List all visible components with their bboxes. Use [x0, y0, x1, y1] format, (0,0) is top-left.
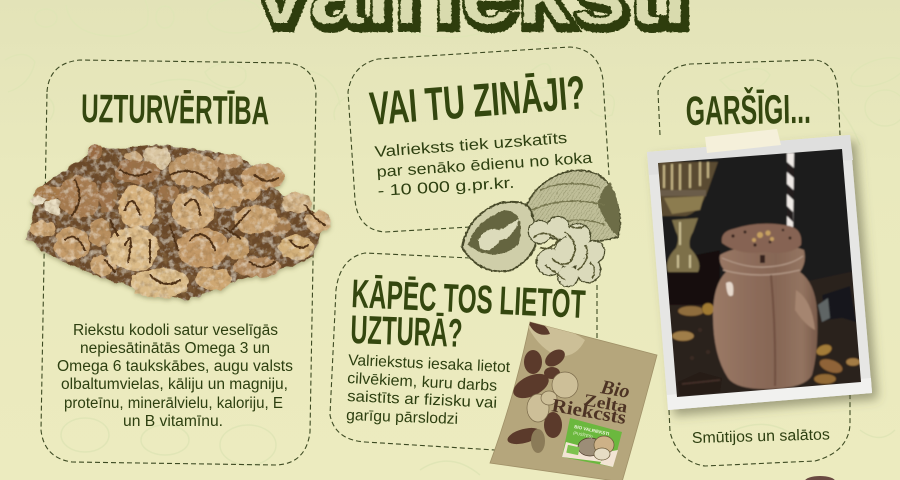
trophy — [658, 162, 718, 272]
heading: tasty: GARŠĪGI... — [685, 86, 811, 134]
package artwork: leaves — [506, 320, 585, 453]
body text: nutrition: Omega 6 taukskābes, augu valsts — [57, 358, 293, 375]
body text: nutrition: nepiesātinātās Omega 3 un — [80, 340, 270, 357]
illustration: walnuts — [462, 170, 620, 286]
heading: nutrition: UZTURVĒRTĪBA — [81, 87, 269, 133]
package green label — [562, 418, 622, 467]
body text: why use: saistīts ar fizisku vai — [347, 388, 497, 412]
body text: did you know: - 10 000 g.pr.kr. — [377, 175, 515, 200]
package brand name: Zelta — [582, 390, 629, 417]
panel: nutrition — [27, 60, 330, 465]
photo: smoothie polaroid — [647, 129, 872, 410]
image: product package — [490, 320, 657, 480]
panel: why use — [330, 253, 597, 450]
kernel crevices — [65, 170, 325, 284]
package brand name: Riekcsts — [550, 395, 628, 429]
body text: did you know: par senāko ēdienu no koka — [376, 150, 593, 181]
table — [670, 272, 861, 397]
foam topping — [722, 224, 801, 253]
body text: why use — [346, 352, 511, 428]
body text: did you know: Valrieksts tiek uzskatīts — [374, 130, 568, 161]
tape — [705, 129, 781, 153]
body text: why use: Valriekstus iesaka lietot — [348, 352, 511, 376]
package green label: (PUSĪTES) — [573, 430, 594, 439]
heading: did you know: VAI TU ZINĀJI? — [368, 65, 587, 135]
package brand name: Bio — [598, 376, 631, 403]
heading: why use — [350, 272, 586, 356]
photo scene — [658, 149, 861, 397]
camera object — [818, 286, 856, 322]
body text: nutrition: olbaltumvielas, kāliju un magniju, — [61, 376, 288, 393]
package brand name — [550, 376, 631, 429]
body text: nutrition — [57, 322, 293, 430]
body text: why use: garīgu pārslodzi — [346, 407, 458, 428]
body text: did you know — [374, 130, 593, 200]
walnut pieces — [672, 303, 860, 384]
body text: nutrition: proteīnu, minerālvielu, kaloriju, E — [64, 395, 283, 412]
chocolate — [678, 372, 722, 396]
heading: why use: UZTURĀ? — [350, 308, 463, 356]
body text: nutrition: un B vitamīnu. — [123, 413, 223, 430]
panel: tasty — [658, 60, 850, 466]
jar — [713, 224, 817, 389]
partial element: bottom edge — [805, 476, 835, 480]
package green label: BIO VALRIEKSTI — [574, 424, 610, 436]
body text: nutrition: Riekstu kodoli satur veselīgās — [73, 322, 278, 339]
straw — [787, 153, 794, 236]
panel: did you know — [348, 47, 609, 232]
image: walnut kernel pile — [27, 144, 330, 300]
body text: why use: cilvēkiem, kuru darbs — [347, 370, 498, 395]
caption: smoothies: Smūtijos un salātos — [692, 426, 830, 447]
heading: why use: KĀPĒC TOS LIETOT — [351, 272, 586, 327]
